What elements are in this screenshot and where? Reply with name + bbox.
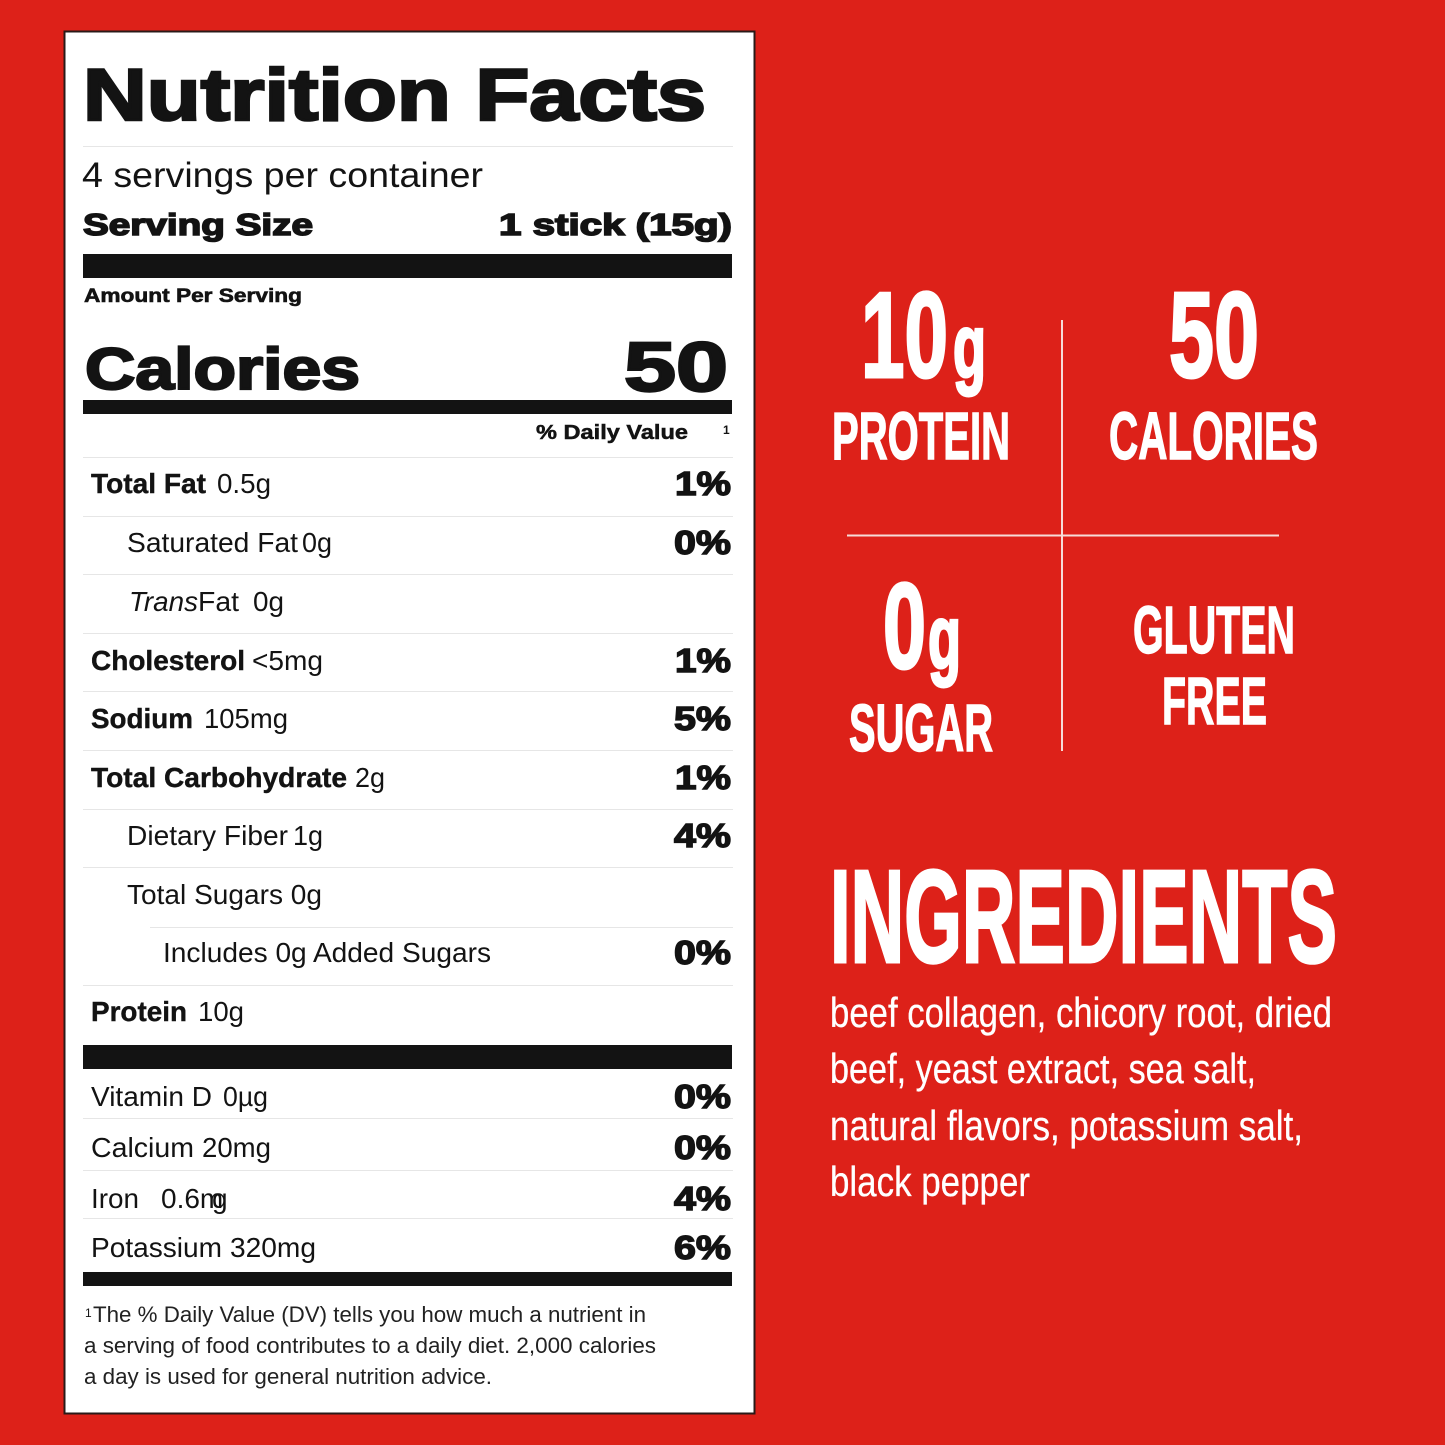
stat: protein: 10: [861, 267, 948, 403]
row: total carbohydrate: Total Carbohydrate: [91, 762, 347, 793]
row: protein: Protein: [91, 996, 187, 1027]
stat grid: [832, 267, 1318, 766]
row: iron: Iron: [91, 1183, 139, 1214]
row: total fat: Total Fat: [91, 468, 206, 499]
footnote: 1: [85, 1306, 92, 1320]
row: trans fat: Trans: [129, 586, 198, 617]
calories: [85, 328, 728, 406]
row: calcium: [91, 1129, 731, 1166]
stat: sugar: SUGAR: [849, 691, 993, 766]
serving size: [83, 207, 732, 242]
row: iron: [91, 1180, 731, 1217]
row: saturated fat: Saturated Fat: [127, 527, 298, 558]
row: cholesterol: [91, 642, 731, 679]
row: sodium: 105mg: [204, 703, 288, 734]
row: calcium: 20mg: [202, 1132, 271, 1163]
row: potassium: [91, 1229, 731, 1266]
panel: nutrition facts label: [64, 32, 754, 1414]
stat: calories: CALORIES: [1109, 399, 1318, 474]
row: total fat: 0.5g: [217, 468, 271, 499]
row: calcium: Calcium: [91, 1132, 194, 1163]
stat: protein: [832, 267, 1010, 474]
stat: calories: [1109, 267, 1318, 474]
serving size: 1 stick (15g): [499, 207, 732, 242]
stat: gluten free: FREE: [1162, 664, 1267, 739]
row: total sugars: Total Sugars 0g: [127, 879, 322, 910]
stat: protein: PROTEIN: [832, 399, 1010, 474]
servings per container: 4 servings per container: [82, 155, 483, 195]
stat: calories: 50: [1169, 267, 1259, 403]
row: trans fat: Fat: [198, 586, 239, 617]
thick divider: [83, 1045, 732, 1069]
ingredients list: natural flavors, potassium salt,: [830, 1102, 1303, 1149]
row: dietary fiber: 4%: [674, 817, 731, 854]
ingredients list: beef collagen, chicory root, dried: [830, 989, 1332, 1036]
row: saturated fat: 0g: [302, 527, 332, 558]
row: iron: 4%: [674, 1180, 731, 1217]
row: total fat: [91, 465, 731, 502]
row: protein: 10g: [198, 996, 244, 1027]
row: dietary fiber: 1g: [293, 820, 323, 851]
ingredients list: black pepper: [830, 1158, 1030, 1205]
row: dietary fiber: Dietary Fiber: [127, 820, 288, 851]
amount per serving: Amount Per Serving: [84, 286, 302, 307]
row: saturated fat: [127, 524, 731, 561]
row: total carbohydrate: 2g: [355, 762, 385, 793]
row: total carbohydrate: 1%: [675, 759, 731, 796]
ingredients list: [830, 989, 1332, 1205]
daily value header: [536, 422, 730, 444]
row: vitamin d: 0%: [674, 1078, 731, 1115]
stat: sugar: [849, 558, 993, 766]
row: potassium: 320mg: [230, 1232, 316, 1263]
row: iron: 0.6m: [161, 1183, 223, 1214]
ingredients list: beef, yeast extract, sea salt,: [830, 1045, 1256, 1092]
stat: gluten free: [1133, 593, 1295, 739]
stat: gluten free: GLUTEN: [1133, 593, 1295, 668]
row: sodium: 5%: [674, 700, 731, 737]
row: cholesterol: <5mg: [252, 645, 323, 676]
row: iron: g: [212, 1183, 228, 1214]
row: added sugars: Includes 0g Added Sugars: [163, 937, 491, 968]
daily value header: % Daily Value: [536, 422, 688, 444]
row: added sugars: 0%: [674, 934, 731, 971]
footnote: [84, 1302, 656, 1389]
row: protein: [91, 996, 244, 1027]
title: Nutrition Facts: [83, 55, 706, 136]
row: saturated fat: 0%: [674, 524, 731, 561]
row: calcium: 0%: [674, 1129, 731, 1166]
medium divider: [83, 400, 732, 414]
row: cholesterol: Cholesterol: [91, 645, 245, 676]
calories: 50: [624, 328, 728, 406]
row: vitamin d: 0µg: [223, 1081, 268, 1112]
row: total carbohydrate: [91, 759, 731, 796]
row: total fat: 1%: [675, 465, 731, 502]
calories: Calories: [85, 337, 360, 402]
row: vitamin d: Vitamin D: [91, 1081, 212, 1112]
stat: sugar: g: [928, 588, 961, 688]
row: added sugars: [163, 934, 731, 971]
row: potassium: Potassium: [91, 1232, 222, 1263]
row: sodium: [91, 700, 731, 737]
serving size: Serving Size: [83, 207, 313, 242]
row: vitamin d: [91, 1078, 731, 1115]
row: trans fat: [129, 586, 284, 617]
row: cholesterol: 1%: [675, 642, 731, 679]
row: trans fat: 0g: [253, 586, 284, 617]
thick divider: [83, 254, 732, 278]
footnote: a day is used for general nutrition advice.: [84, 1364, 492, 1389]
footnote: a serving of food contributes to a daily diet. 2,000 calories: [84, 1333, 656, 1358]
daily value header: 1: [723, 423, 730, 437]
stat: sugar: 0: [883, 558, 926, 694]
stat: protein: g: [953, 297, 986, 397]
row: potassium: 6%: [674, 1229, 731, 1266]
footnote: The % Daily Value (DV) tells you how much a nutrient in: [93, 1302, 646, 1327]
medium divider: [83, 1272, 732, 1286]
row: dietary fiber: [127, 817, 731, 854]
row: sodium: Sodium: [91, 703, 193, 734]
